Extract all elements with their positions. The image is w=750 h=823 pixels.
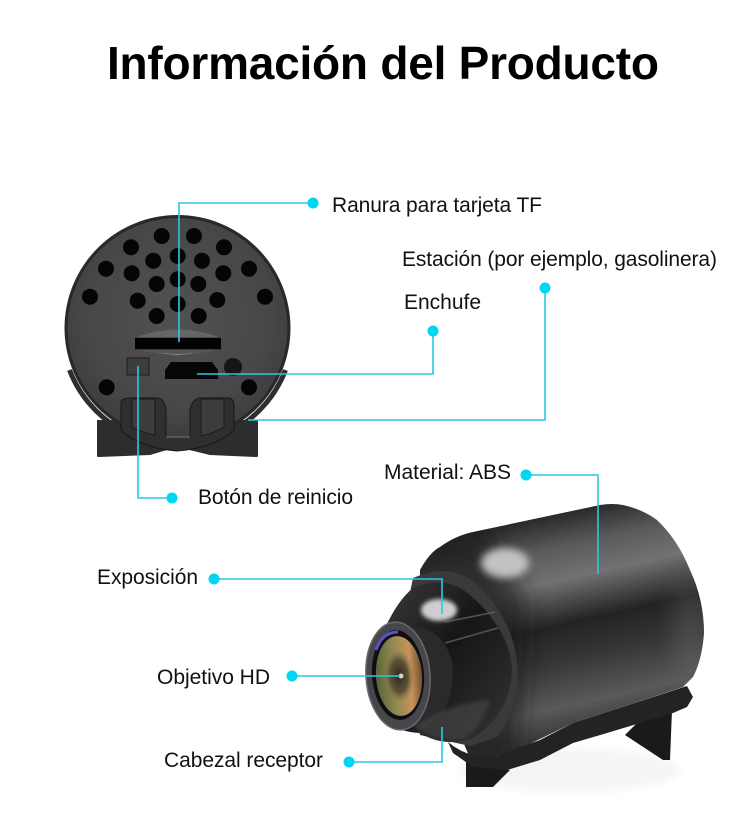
rear disc [64, 215, 290, 441]
label: HD lens: Objetivo HD [157, 666, 270, 689]
label: station: Estación (por ejemplo, gasolinera) [402, 248, 717, 271]
lens glass [369, 628, 427, 722]
glass dome [385, 582, 512, 742]
ground shadow [460, 748, 680, 792]
dome reflection [421, 599, 457, 621]
lens ring [362, 620, 434, 732]
body shell [420, 504, 704, 758]
front collar [400, 571, 518, 746]
stand base [97, 420, 258, 457]
body shading [420, 528, 704, 756]
callout dots [166, 198, 550, 768]
camera front view [362, 504, 706, 792]
reset button [127, 358, 149, 375]
lens tube [400, 628, 453, 730]
power indicator [224, 358, 242, 376]
label: plug: Enchufe [404, 291, 481, 314]
speaker holes [82, 228, 273, 395]
side clips [70, 370, 286, 428]
USB port [165, 362, 218, 379]
leader lines [138, 203, 598, 762]
label: TF card slot: Ranura para tarjeta TF [332, 194, 542, 217]
stand feet [466, 710, 672, 787]
label: exposure: Exposición [97, 566, 198, 589]
label: material: Material: ABS [384, 461, 511, 484]
stand rail [448, 686, 693, 770]
camera rear view [64, 215, 290, 457]
label: reset button: Botón de reinicio [198, 486, 353, 509]
hinge clips [121, 398, 234, 451]
title: Información del Producto [107, 37, 659, 89]
label: receiver head: Cabezal receptor [164, 749, 323, 772]
dome lower tint [415, 700, 490, 740]
TF card slot [135, 330, 221, 354]
